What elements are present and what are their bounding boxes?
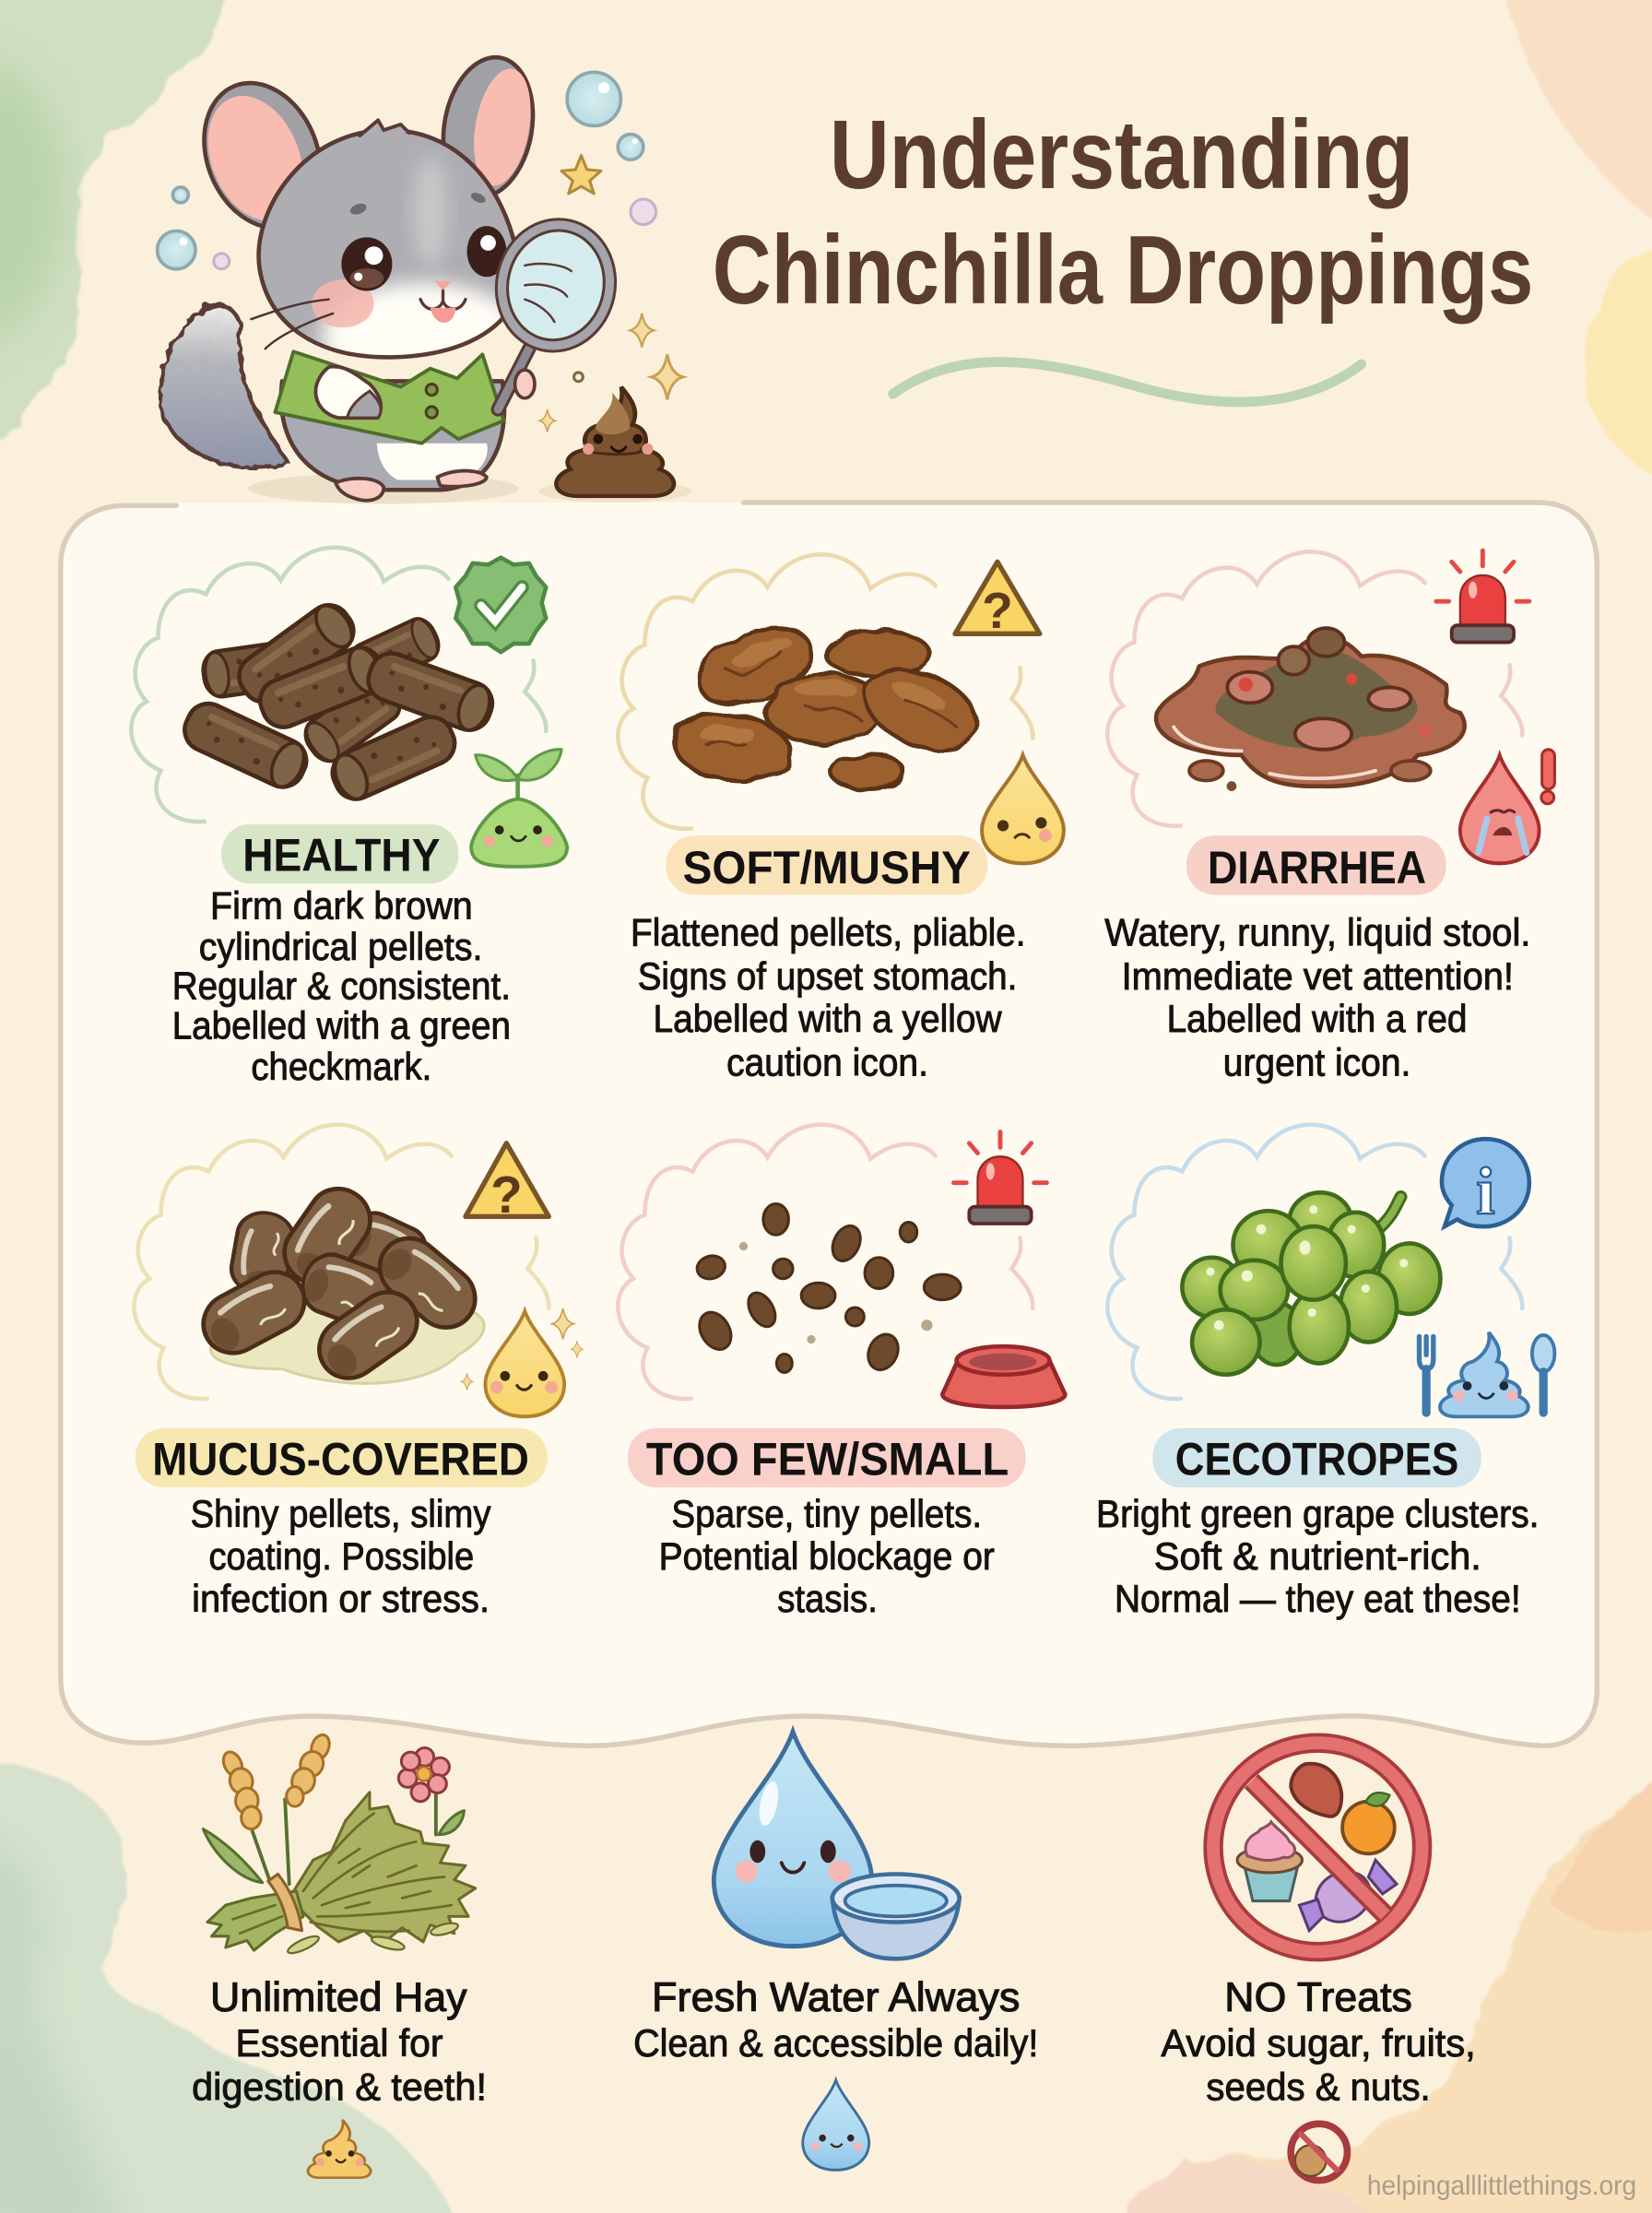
strawberry	[1291, 1764, 1341, 1817]
label pill: TOO FEW/SMALL	[646, 1432, 1009, 1485]
title	[713, 101, 1533, 325]
icon: sprout blob	[471, 750, 567, 867]
tip text: seeds & nuts.	[1206, 2065, 1431, 2108]
card: healthy	[131, 548, 567, 1088]
description	[191, 1493, 491, 1620]
whiskers	[251, 300, 333, 349]
watercolor wash: bottom right peach	[1112, 1771, 1652, 2213]
label pill: HEALTHY	[242, 828, 440, 881]
icon: small yellow poop	[308, 2120, 371, 2178]
panel: droppings grid	[61, 503, 1597, 1746]
cloud outline	[131, 548, 546, 822]
icon: red siren	[1436, 550, 1529, 643]
card: cecotropes	[1096, 1125, 1554, 1620]
body	[281, 381, 504, 490]
tip text: Clean & accessible daily!	[633, 2022, 1038, 2065]
tail	[160, 304, 289, 467]
watercolor wash: bottom left green	[0, 1764, 463, 2213]
icon: empty red bowl	[942, 1346, 1065, 1407]
green grape cluster	[1182, 1192, 1440, 1375]
tip text: Fresh Water Always	[652, 1975, 1020, 2020]
card: too few/small	[618, 1125, 1065, 1620]
description: Bright green grape clusters.	[1096, 1493, 1540, 1535]
description: Immediate vet attention!	[1122, 955, 1514, 998]
icon: info speech bubble	[1442, 1139, 1529, 1228]
cloud outline	[1107, 551, 1522, 826]
icon: green check badge	[455, 558, 546, 652]
cloud outline	[618, 1125, 1032, 1399]
description: checkmark.	[251, 1046, 431, 1088]
head	[256, 118, 515, 360]
description: Signs of upset stomach.	[638, 955, 1017, 998]
pellets illustration	[178, 597, 498, 806]
cloud outline	[134, 1125, 549, 1399]
icon: caution triangle: ?	[982, 582, 1013, 639]
title: Understanding	[830, 101, 1413, 209]
nose and mouth	[434, 281, 452, 290]
description: Potential blockage or	[659, 1535, 995, 1578]
icon: small water drop	[803, 2080, 869, 2170]
description: coating. Possible	[208, 1535, 474, 1578]
tip text: Avoid sugar, fruits,	[1161, 2022, 1476, 2065]
description: Sparse, tiny pellets.	[671, 1493, 982, 1535]
tip text: digestion & teeth!	[192, 2065, 487, 2108]
card: diarrhea	[1104, 550, 1554, 1083]
description	[1096, 1493, 1540, 1620]
description: urgent icon.	[1223, 1041, 1410, 1083]
tip text	[1161, 1975, 1476, 2108]
description: Labelled with a red	[1167, 998, 1468, 1040]
icon: hay bundle with wheat and flower	[203, 1733, 476, 1957]
tip: no treats	[1161, 1743, 1476, 2181]
tip text	[192, 1975, 487, 2108]
label pill: DIARRHEA	[1208, 841, 1426, 893]
scattered tiny pellets	[693, 1204, 961, 1375]
card: soft/mushy	[618, 554, 1064, 1083]
cloud outline	[618, 554, 1032, 829]
label pill: SOFT/MUSHY	[683, 841, 971, 893]
icon: crying red drop with exclamation	[1460, 750, 1554, 863]
icon: water drop and bowl	[714, 1732, 960, 1959]
description: Watery, runny, liquid stool.	[1104, 912, 1530, 954]
description: caution icon.	[726, 1041, 928, 1083]
label pill: CECOTROPES	[1175, 1432, 1458, 1485]
watercolor wash: top right peach and yellow	[1503, 0, 1652, 487]
bubbles, stars and sparkles	[158, 72, 683, 432]
description: Soft & nutrient-rich.	[1154, 1535, 1481, 1578]
description: infection or stress.	[192, 1578, 490, 1620]
card: mucus-covered	[134, 1125, 583, 1620]
flattened pellets	[669, 614, 989, 789]
tip: fresh water	[633, 1732, 1038, 2170]
eyes	[341, 237, 392, 290]
website credit: helpingalllittlethings.org	[1367, 2171, 1636, 2201]
tip text: NO Treats	[1224, 1975, 1412, 2020]
icon: happy yellow drop with sparkles	[461, 1308, 583, 1416]
icon: small no cookie	[1291, 2124, 1347, 2181]
magnifying glass	[498, 349, 529, 409]
description: stasis.	[777, 1578, 878, 1620]
slimy pellets	[193, 1177, 488, 1390]
puddle illustration	[1156, 628, 1465, 791]
description	[172, 884, 511, 1088]
icon: sad yellow drop	[982, 755, 1064, 863]
description: Flattened pellets, pliable.	[631, 912, 1026, 954]
description: Shiny pellets, slimy	[191, 1493, 491, 1535]
tip text: Essential for	[236, 2022, 443, 2065]
tip text: Unlimited Hay	[210, 1975, 467, 2020]
icon: red siren	[953, 1132, 1046, 1224]
description: Normal — they eat these!	[1115, 1578, 1521, 1620]
tip text	[633, 1975, 1038, 2065]
icon: blue poop with cutlery	[1419, 1332, 1554, 1416]
description: Labelled with a green	[172, 1005, 511, 1047]
label pill: MUCUS-COVERED	[152, 1432, 529, 1485]
chinchilla mascot	[160, 50, 621, 504]
icon: info speech bubble: i	[1476, 1154, 1495, 1228]
candy	[1299, 1860, 1397, 1932]
cloud outline	[1107, 1125, 1522, 1399]
icon: prohibited treats	[1213, 1743, 1422, 1952]
description: Regular & consistent.	[172, 965, 511, 1008]
cupcake	[1237, 1822, 1302, 1901]
icon: caution triangle	[955, 562, 1040, 639]
description: Firm dark brown	[210, 884, 473, 927]
ears	[183, 50, 543, 245]
tip: unlimited hay	[192, 1733, 487, 2178]
icon: caution triangle: ?	[490, 1166, 523, 1224]
title swoosh	[893, 362, 1362, 402]
description	[631, 912, 1026, 1083]
orange	[1342, 1793, 1395, 1853]
icon: caution triangle	[466, 1143, 549, 1224]
description: cylindrical pellets.	[199, 926, 482, 968]
smiling poop	[539, 387, 691, 503]
green vest	[275, 351, 503, 444]
description	[659, 1493, 995, 1620]
description	[1104, 912, 1530, 1083]
description: Labelled with a yellow	[654, 998, 1002, 1040]
watercolor wash: top left green	[0, 0, 233, 459]
